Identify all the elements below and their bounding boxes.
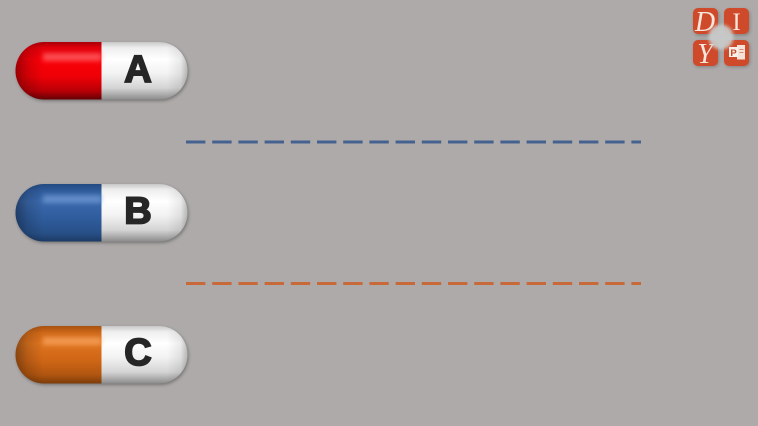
logo: DIY PowerPoint [693,7,750,70]
label C: C [124,332,152,374]
dashed line: orange [186,282,641,285]
icon: PowerPoint: P [730,48,737,59]
capsule C [16,326,188,385]
logo letter Y: Y [697,39,716,70]
logo letter D: D [694,7,715,38]
logo centre circle [708,24,734,50]
capsule A [16,42,188,101]
label B: B [124,191,152,233]
dashed line: blue [186,140,641,144]
label A: A [124,49,152,91]
capsule B [16,184,188,243]
logo letter I: I [732,9,741,36]
